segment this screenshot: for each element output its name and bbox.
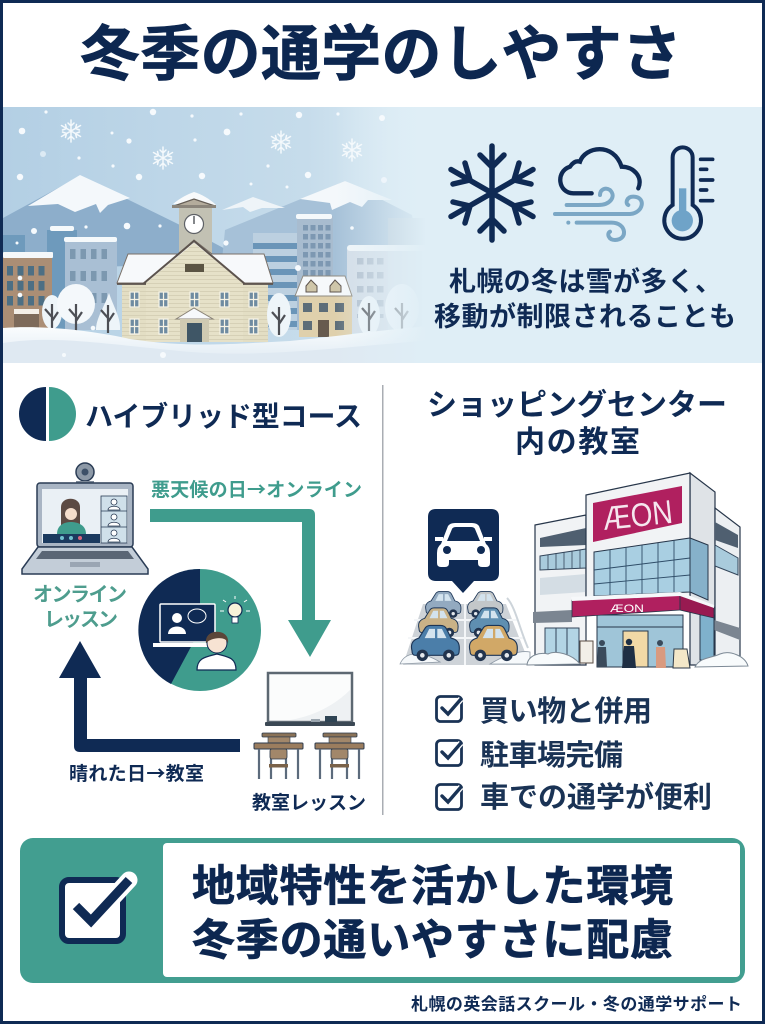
callout text: 地域特性を活かした環境 xyxy=(192,863,673,911)
panel: winter hero banner xyxy=(3,107,762,363)
title: 冬季の通学のしやすさ xyxy=(80,21,682,88)
icon: thermometer xyxy=(664,147,713,239)
heading: shopping center xyxy=(427,389,727,459)
snowy trees xyxy=(42,284,419,337)
people and signs xyxy=(580,639,690,668)
clock tower building xyxy=(117,192,273,342)
callout text xyxy=(192,863,673,965)
hero text xyxy=(434,266,736,332)
icon: large checkbox xyxy=(62,880,129,941)
check item: parking: 駐車場完備 xyxy=(480,739,623,772)
label: online lesson: レッスン xyxy=(44,609,118,631)
hero text: 札幌の冬は雪が多く、 xyxy=(449,266,722,297)
icon: half circle xyxy=(19,387,76,441)
label: online lesson xyxy=(33,584,127,631)
label: bad weather to online: 悪天候の日→オンライン xyxy=(151,475,362,502)
icon: whiteboard xyxy=(265,673,355,726)
AEON sign text: ÆON xyxy=(601,493,674,537)
label: online lesson: オンライン xyxy=(33,584,127,606)
icon: snowflake xyxy=(451,146,533,240)
falling snow xyxy=(16,109,387,358)
heading: shopping center: ショッピングセンター xyxy=(427,389,727,422)
central hybrid circle xyxy=(138,569,261,691)
icon: wind and cloud xyxy=(555,149,642,240)
heading: shopping center: 内の教室 xyxy=(515,426,640,459)
label: clear day to classroom: 晴れた日→教室 xyxy=(69,759,204,786)
canopy xyxy=(572,595,680,617)
illustration: snowy Sapporo clock tower scene xyxy=(3,107,431,363)
panel: shopping center classroom xyxy=(400,389,748,814)
callout text: 冬季の通いやすさに配慮 xyxy=(192,917,673,965)
label: classroom lesson: 教室レッスン xyxy=(252,792,366,814)
snow piles xyxy=(527,652,580,665)
icon: laptop with video call xyxy=(22,463,148,574)
arrow: teal to classroom xyxy=(150,509,331,657)
check item: car commute: 車での通学が便利 xyxy=(480,780,712,814)
snow ground xyxy=(3,326,430,363)
hero text: 移動が制限されることも xyxy=(434,301,736,332)
panel: conclusion callout xyxy=(20,838,745,983)
icon: classroom desks xyxy=(254,733,364,779)
footer note: 札幌の英会話スクール・冬の通学サポート xyxy=(411,994,742,1014)
icon: parking lot with cars xyxy=(400,592,530,665)
icon: car pin xyxy=(428,509,499,593)
panel: hybrid course xyxy=(19,387,366,814)
small tan house xyxy=(295,276,352,337)
heading: hybrid course: ハイブリッド型コース xyxy=(85,400,362,432)
illustration: AEON mall building: ÆON xyxy=(610,603,644,615)
illustration: AEON mall building xyxy=(527,473,748,668)
check item: shopping: 買い物と併用 xyxy=(480,695,652,728)
arrow: navy to online xyxy=(59,641,240,752)
checklist xyxy=(436,695,712,814)
